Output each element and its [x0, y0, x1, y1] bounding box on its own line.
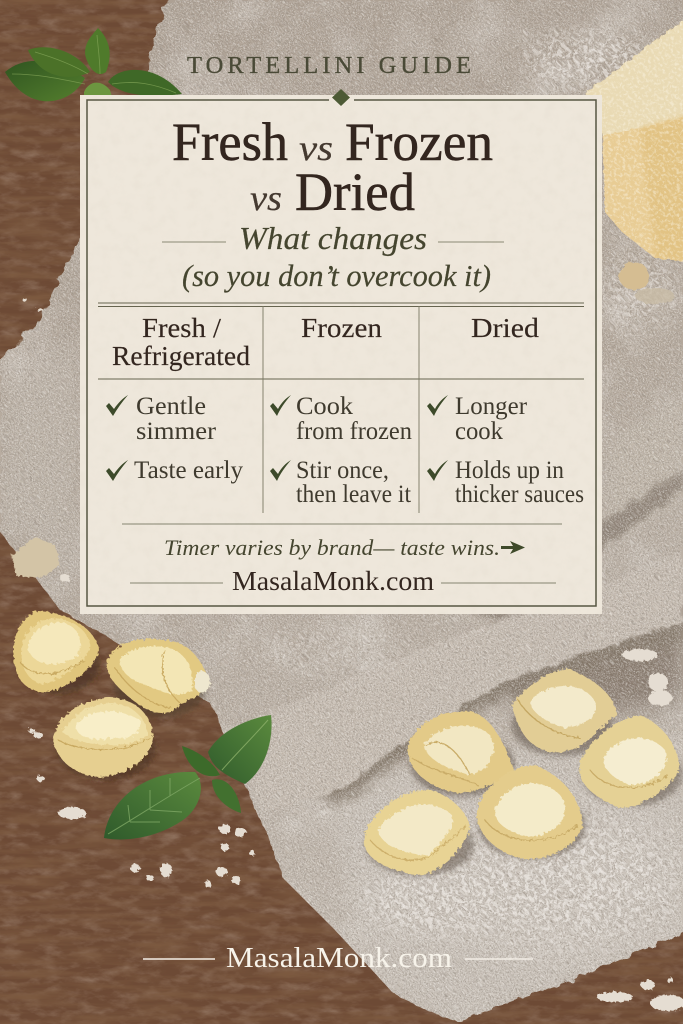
column: dried: cook — [455, 418, 503, 445]
subtitle: (so you don’t overcook it) — [182, 259, 491, 293]
table headers: Frozen — [301, 313, 383, 343]
icon: check — [427, 460, 448, 481]
card inner border — [87, 100, 596, 606]
icon: check — [106, 460, 128, 481]
subtitle: What changes — [239, 220, 427, 256]
title: Fresh — [172, 112, 288, 172]
table headers — [112, 313, 540, 371]
title: vs — [299, 128, 333, 168]
title: Dried — [295, 162, 415, 222]
icon: check — [270, 395, 291, 416]
column: fresh: Taste early — [134, 457, 243, 484]
column: fresh: Gentle — [136, 393, 206, 420]
tortellini 7 — [477, 765, 586, 859]
tortellini 2 — [107, 639, 210, 718]
basil leaves bottom — [104, 715, 272, 839]
title: vs — [250, 178, 282, 218]
table headers: Dried — [471, 313, 540, 343]
tortellini 8 — [364, 790, 474, 876]
timer note: Timer varies by brand— taste wins. — [164, 535, 500, 560]
table headers: Refrigerated — [112, 341, 251, 371]
column: fresh: simmer — [136, 418, 217, 445]
bottom website footer: MasalaMonk.com — [226, 942, 452, 974]
column: dried: thicker sauces — [455, 481, 584, 508]
icon: check — [106, 395, 128, 416]
icon: diamond ornament — [332, 89, 350, 106]
tortellini 1 — [13, 611, 100, 694]
icon: check — [270, 460, 291, 481]
tortellini 6 — [579, 715, 682, 808]
eyebrow heading: TORTELLINI GUIDE — [187, 52, 471, 79]
flour crumbs — [12, 298, 683, 1011]
column: frozen: then leave it — [296, 481, 411, 508]
comparison table — [98, 303, 584, 513]
column: frozen: from frozen — [296, 418, 412, 445]
title — [172, 112, 493, 222]
tortellini 5 — [512, 669, 617, 756]
tortellini 4 — [408, 711, 514, 796]
table headers: Fresh / — [142, 313, 222, 343]
subtitle — [162, 220, 504, 293]
basil leaves top left — [5, 28, 182, 101]
main card — [80, 89, 602, 614]
column: frozen: Cook — [296, 393, 354, 420]
column: dried: Longer — [455, 393, 528, 420]
tortellini cluster right — [364, 669, 682, 876]
parmesan cheese block — [580, 10, 683, 304]
icon: arrow — [501, 541, 525, 554]
icon: check — [427, 395, 448, 416]
tortellini cluster left — [13, 611, 210, 780]
column: dried — [427, 393, 584, 508]
column: frozen: Stir once, — [296, 457, 389, 484]
column: fresh — [106, 393, 243, 484]
tortellini 3 — [53, 698, 156, 780]
column: dried: Holds up in — [455, 457, 564, 484]
timer note — [122, 524, 562, 560]
column: frozen — [270, 393, 412, 508]
card website footer: MasalaMonk.com — [232, 566, 434, 596]
title: Frozen — [345, 112, 493, 172]
